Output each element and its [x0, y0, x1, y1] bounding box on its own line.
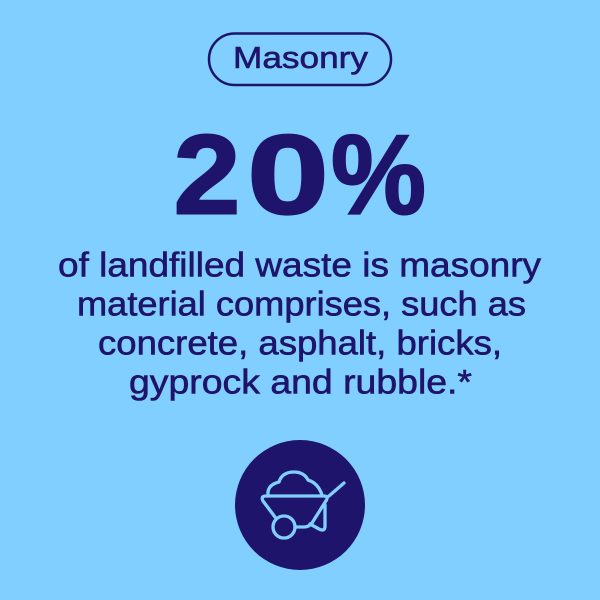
- wheelbarrow tray: [262, 496, 327, 527]
- headline statistic: 20%: 2: [174, 112, 240, 238]
- description text block: [58, 246, 541, 402]
- category pill: Masonry: [209, 34, 391, 85]
- headline statistic: 20%: %: [331, 112, 426, 238]
- description text block: of landfilled waste is masonry: [58, 246, 541, 284]
- icon: wheelbarrow in circle: [235, 440, 365, 570]
- wheelbarrow wheel: [273, 516, 295, 538]
- wheelbarrow load: [268, 472, 322, 495]
- headline statistic: 20%: [174, 112, 426, 238]
- description text block: concrete, asphalt, bricks,: [98, 324, 502, 362]
- description text block: material comprises, such as: [77, 286, 526, 324]
- headline statistic: 20%: 0: [247, 112, 329, 238]
- description text block: gyprock and rubble.*: [129, 364, 472, 402]
- category pill: Masonry: Masonry: [233, 40, 369, 75]
- wheelbarrow leg: [310, 505, 325, 530]
- wheelbarrow handle: [329, 483, 344, 496]
